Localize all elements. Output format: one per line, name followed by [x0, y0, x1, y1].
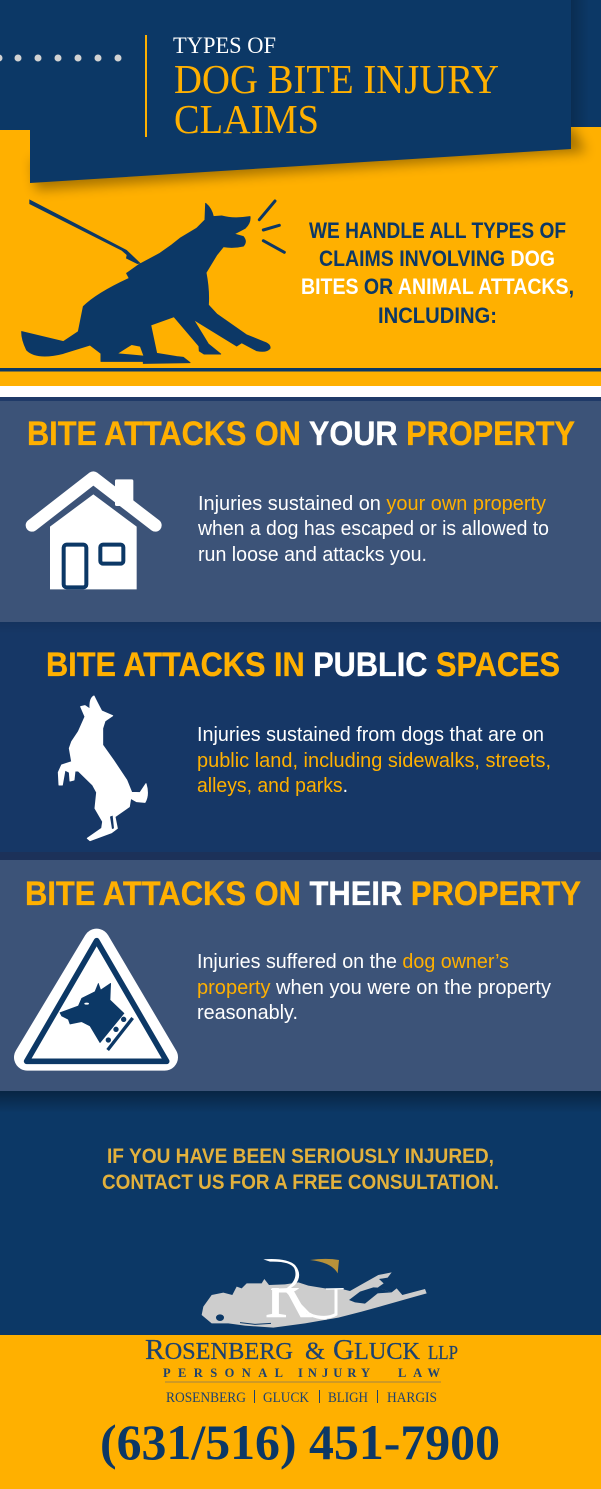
title [173, 33, 499, 142]
bark lines [259, 201, 284, 252]
icon: dog standing on hind legs [58, 696, 147, 841]
description [197, 724, 551, 797]
firm name: LLP [428, 1342, 458, 1364]
description: Injuries sustained from dogs that are on [197, 724, 544, 746]
header: title banner [0, 0, 571, 183]
icon: guard dog warning triangle [27, 941, 167, 1061]
description: run loose and attacks you. [198, 544, 427, 566]
description: reasonably. [197, 1002, 298, 1024]
heading: BITE ATTACKS IN PUBLIC SPACES [46, 646, 560, 684]
phone number: (631/516) 451-7900 [100, 1414, 500, 1470]
tagline: PERSONAL [163, 1366, 283, 1380]
description: public land, including sidewalks, streets, [197, 750, 551, 772]
call to action text: IF YOU HAVE BEEN SERIOUSLY INJURED, [107, 1145, 494, 1168]
footer: navy call to action area [0, 1091, 601, 1336]
description: property when you were on the property [197, 977, 551, 999]
description: Injuries sustained on your own property [198, 493, 546, 515]
title: CLAIMS [174, 96, 319, 142]
tagline: INJURY [298, 1366, 370, 1380]
icon: house [32, 478, 155, 589]
description [197, 493, 549, 566]
ground line [0, 368, 601, 372]
header: navy backdrop [0, 0, 601, 190]
page background: yellow header area [0, 0, 601, 386]
tagline [163, 1366, 440, 1380]
logo: Long Island map with monogram: R [264, 1240, 313, 1336]
firm name: GLUCK [333, 1334, 421, 1366]
description: when a dog has escaped or is allowed to [197, 518, 549, 540]
panel: bite attacks on your property [0, 397, 601, 622]
partner names: ROSENBERG [166, 1390, 246, 1406]
intro text: BITES OR ANIMAL ATTACKS, [301, 274, 574, 299]
logo: Long Island map with monogram [202, 1258, 427, 1328]
white spacer band [0, 386, 601, 397]
heading: BITE ATTACKS ON THEIR PROPERTY [25, 875, 581, 913]
intro text: WE HANDLE ALL TYPES OF [309, 218, 566, 243]
partner names [166, 1390, 437, 1406]
intro text [301, 218, 574, 328]
dotted decoration [0, 54, 122, 62]
title: TYPES OF [173, 33, 276, 58]
heading: BITE ATTACKS ON YOUR PROPERTY [27, 415, 575, 453]
description: Injuries suffered on the dog owner’s [197, 951, 509, 973]
title: DOG BITE INJURY [174, 56, 499, 102]
panel: bite attacks on their property [0, 860, 601, 1091]
call to action text: CONTACT US FOR A FREE CONSULTATION. [102, 1171, 499, 1194]
partner names: HARGIS [387, 1390, 437, 1406]
description [197, 951, 551, 1024]
icon: barking dog on leash [22, 199, 284, 363]
footer: yellow contact band [0, 1334, 601, 1489]
partner names: BLIGH [328, 1390, 368, 1406]
call to action text [102, 1145, 499, 1194]
tagline: LAW [398, 1366, 440, 1380]
partner names: GLUCK [263, 1390, 309, 1406]
firm name: & [305, 1338, 325, 1365]
title divider [145, 35, 147, 137]
firm name: ROSENBERG [145, 1334, 293, 1366]
panel: bite attacks in public spaces [0, 622, 601, 860]
description: alleys, and parks. [197, 775, 348, 797]
intro text: CLAIMS INVOLVING DOG [319, 246, 555, 271]
firm name [145, 1334, 458, 1366]
intro text: INCLUDING: [378, 303, 497, 328]
